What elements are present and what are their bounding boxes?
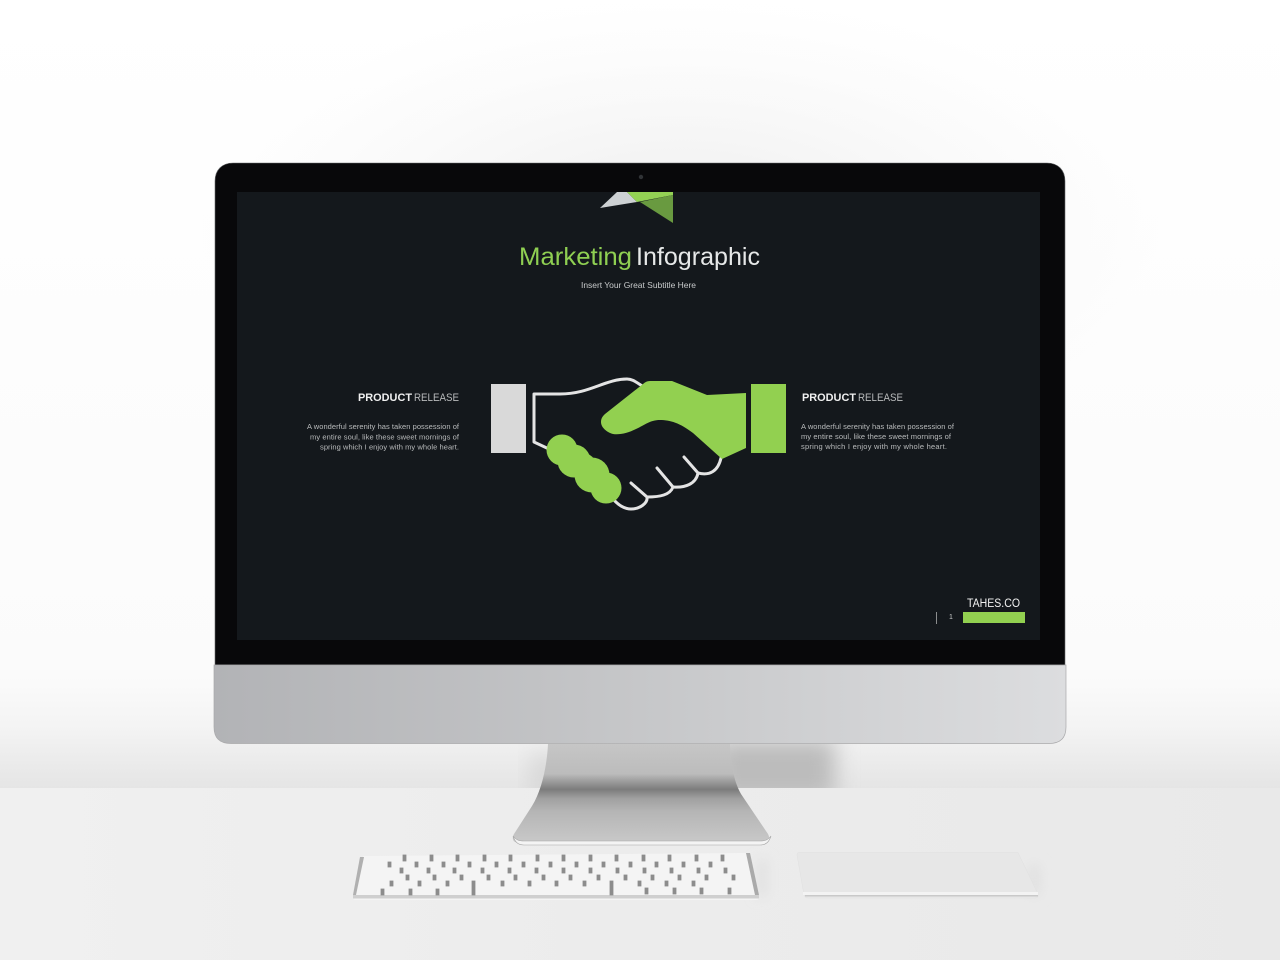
left body text: A wonderful serenity has taken possession of <box>307 422 460 431</box>
icon: webcam <box>639 175 643 179</box>
monitor stand <box>513 744 771 845</box>
left body text <box>307 422 460 452</box>
left cuff <box>491 384 526 453</box>
right body text: A wonderful serenity has taken possession of <box>801 422 955 431</box>
brand bar <box>963 612 1025 623</box>
right heading <box>802 392 903 404</box>
right body text: my entire soul, like these sweet mornings of <box>801 432 952 441</box>
left hand outline <box>534 379 721 509</box>
icon: folded ribbon logo <box>600 192 673 223</box>
text block: left product release <box>307 392 460 452</box>
right heading: RELEASE <box>858 392 903 404</box>
subtitle: Insert Your Great Subtitle Here <box>581 280 696 290</box>
right heading: PRODUCT <box>802 392 856 404</box>
key gaps <box>381 855 735 895</box>
screen <box>237 192 1040 640</box>
left heading <box>358 392 459 404</box>
left body text: my entire soul, like these sweet mornings of <box>310 432 460 442</box>
right cuff <box>751 384 786 453</box>
title: Infographic <box>636 243 760 271</box>
right body text <box>801 422 955 451</box>
left heading: PRODUCT <box>358 392 412 404</box>
title: Marketing <box>519 243 632 271</box>
left body text: spring which I enjoy with my whole heart. <box>320 442 459 452</box>
keyboard <box>353 853 759 900</box>
left hand fist <box>546 434 622 504</box>
footer: brand <box>936 598 1025 624</box>
keyboard body <box>353 853 759 900</box>
brand name: TAHES.CO <box>967 598 1020 610</box>
title <box>519 243 760 271</box>
monitor <box>214 163 1066 744</box>
trackpad <box>797 852 1038 898</box>
left heading: RELEASE <box>414 392 459 404</box>
background: desk surface <box>0 788 1280 960</box>
page number: 1 <box>949 614 953 621</box>
text block: right product release <box>801 392 955 451</box>
right hand <box>601 381 746 459</box>
icon: handshake <box>491 379 786 509</box>
monitor chin <box>214 665 1066 744</box>
divider <box>936 612 937 624</box>
monitor bezel <box>215 163 1065 665</box>
stand shadow on wall <box>530 744 845 788</box>
right body text: spring which I enjoy with my whole heart. <box>801 442 947 451</box>
accessory shadows on desk <box>757 860 1040 896</box>
background: soft wall tint behind monitor <box>200 0 1160 460</box>
